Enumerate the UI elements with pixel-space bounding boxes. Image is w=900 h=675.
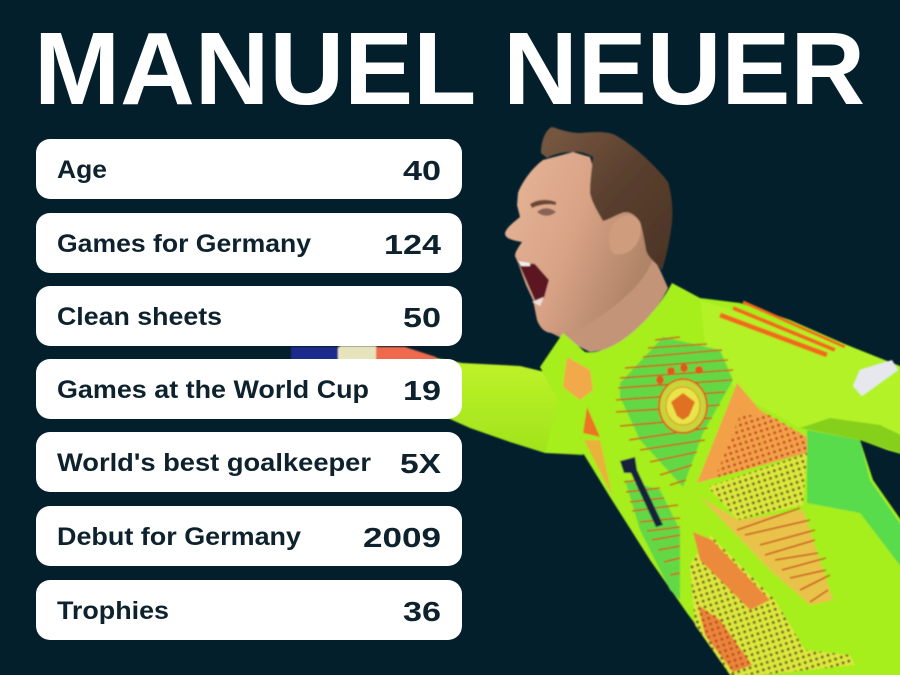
player photo illustration xyxy=(291,127,900,675)
number 1 xyxy=(620,457,663,527)
stat row: games at the World Cup: Games at the World Cup xyxy=(57,376,369,404)
stat row: trophies xyxy=(36,580,462,640)
chest stripes panel xyxy=(616,337,733,487)
side adidas stripes xyxy=(583,407,600,437)
stat row: games for Germany: 124 xyxy=(384,229,442,260)
stars xyxy=(656,364,703,384)
stat row: clean sheets: Clean sheets xyxy=(57,303,222,331)
stat row: world's best goalkeeper: World's best goalkeeper xyxy=(57,449,371,477)
stat row: debut for Germany: 2009 xyxy=(363,522,441,553)
mouth xyxy=(516,258,550,312)
stat row: debut for Germany xyxy=(36,506,462,566)
stat row: games at the World Cup xyxy=(36,359,462,419)
lower left stripes panel xyxy=(624,480,680,600)
stat row: age xyxy=(36,139,462,199)
neck xyxy=(545,235,668,352)
stat row: games for Germany xyxy=(36,213,462,273)
sleeve stripes xyxy=(720,302,845,355)
face xyxy=(505,152,652,333)
stat row: world's best goalkeeper xyxy=(36,432,462,492)
eye and brow xyxy=(530,200,556,216)
green side panel xyxy=(807,430,900,585)
stat row: age: 40 xyxy=(403,155,441,186)
stat row: games for Germany: Games for Germany xyxy=(57,230,311,258)
jersey body xyxy=(540,283,900,675)
stat row: trophies: Trophies xyxy=(57,597,169,625)
stat row: debut for Germany: Debut for Germany xyxy=(57,523,301,551)
stat row: clean sheets: 50 xyxy=(403,302,441,333)
crest xyxy=(659,379,707,433)
ear xyxy=(609,215,641,254)
stat row: trophies: 36 xyxy=(403,596,441,627)
stat row: age: Age xyxy=(57,156,107,184)
wedge dots xyxy=(715,415,807,478)
yellow dotted band xyxy=(708,453,807,520)
sleeve fold shadow xyxy=(800,418,900,458)
orange wedge xyxy=(697,383,807,483)
lower orange panels xyxy=(693,532,770,610)
side orange strip xyxy=(584,440,612,495)
stat row: clean sheets xyxy=(36,286,462,346)
lower stripes panel xyxy=(700,497,833,605)
title: MANUEL NEUER xyxy=(34,11,865,126)
lower yellow dotted band xyxy=(690,535,855,675)
glove xyxy=(291,346,436,362)
hair xyxy=(541,127,672,270)
left shoulder orange panel xyxy=(563,357,593,400)
stat row: world's best goalkeeper: 5X xyxy=(400,448,441,479)
sleeve shading xyxy=(700,300,900,458)
stat row: games at the World Cup: 19 xyxy=(403,375,441,406)
sleeve badge xyxy=(853,360,898,396)
left arm xyxy=(436,345,590,455)
